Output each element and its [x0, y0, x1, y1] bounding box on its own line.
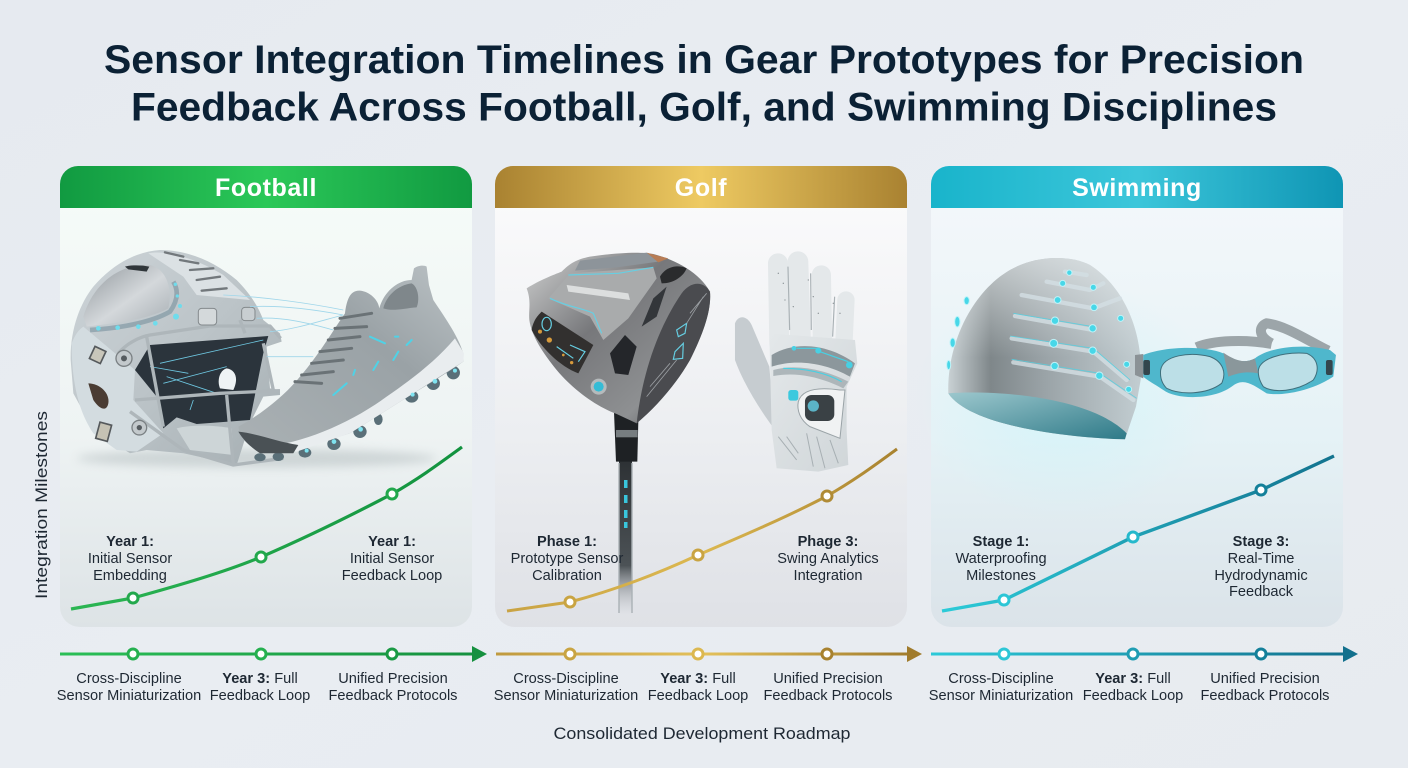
timeline: swimming: Feedback Loop: [1083, 688, 1183, 704]
football label right: Year 1:: [368, 534, 416, 550]
golf label right: Swing Analytics: [777, 551, 879, 567]
timeline: swimming: [929, 646, 1358, 704]
timeline: golf: [494, 646, 922, 704]
football header: [60, 166, 472, 208]
golf label left: Calibration: [532, 568, 602, 584]
timeline: swimming: Year 3: Full: [1095, 671, 1171, 687]
timeline: golf: Sensor Miniaturization: [494, 688, 638, 704]
timeline: golf: Feedback Loop: [648, 688, 748, 704]
club head: [527, 253, 710, 423]
swimming heading: Swimming: [1072, 174, 1202, 202]
illustration: sensor helmet and cleat: [71, 250, 464, 468]
panel: golf: [495, 166, 907, 627]
swimming label left: Stage 1:: [973, 534, 1029, 550]
swim cap: [947, 258, 1141, 439]
timeline: football: Feedback Loop: [210, 688, 310, 704]
timeline: football: Year 3: Full: [222, 671, 298, 687]
golf curve: [507, 449, 897, 611]
football heading: Football: [215, 174, 317, 202]
shaft: [618, 450, 633, 615]
golf label left: Phase 1:: [537, 534, 597, 550]
swimming header: [931, 166, 1343, 208]
timeline: golf: Year 3: Full: [660, 671, 736, 687]
illustration: sensor cap and goggles: [947, 258, 1336, 439]
timeline: golf: Unified Precision: [773, 671, 883, 687]
glow behind cap: [915, 280, 1215, 520]
football curve: [71, 447, 462, 609]
timeline: football: Sensor Miniaturization: [57, 688, 201, 704]
timeline: football: Feedback Protocols: [329, 688, 457, 704]
timeline: football: Cross-Discipline: [76, 671, 182, 687]
swimming label right: Real-Time: [1228, 551, 1294, 567]
timeline: swimming: Cross-Discipline: [948, 671, 1054, 687]
roadmap caption: Consolidated Development Roadmap: [554, 725, 850, 743]
panel: swimming: [915, 166, 1343, 627]
helmet: [71, 250, 283, 465]
golf milestone dots: [565, 491, 832, 607]
football label left: Initial Sensor: [88, 551, 172, 567]
swimming label right: Feedback: [1229, 584, 1294, 600]
golf panel body: [495, 200, 907, 627]
football label left: Year 1:: [106, 534, 154, 550]
thumb: [735, 317, 775, 430]
title: Feedback Across Football, Golf, and Swimming Disciplines: [131, 86, 1277, 130]
golf heading: Golf: [675, 174, 727, 202]
title: Sensor Integration Timelines in Gear Prototypes for Precision: [104, 38, 1304, 82]
golf label left: Prototype Sensor: [511, 551, 624, 567]
title: [104, 38, 1304, 130]
swimming label right: Stage 3:: [1233, 534, 1289, 550]
illustration: driver club: [527, 253, 710, 615]
golf header: [495, 166, 907, 208]
timeline: football: [57, 646, 487, 704]
football label left: Embedding: [93, 568, 167, 584]
y-axis label: Integration Milestones: [33, 411, 51, 599]
ground shadow: [77, 449, 437, 468]
timeline: golf: Cross-Discipline: [513, 671, 619, 687]
cleat shoe: [238, 266, 464, 461]
panel: football: [60, 166, 472, 627]
swimming panel body: [931, 200, 1343, 627]
grip collar: [614, 412, 638, 462]
palm and cuff: [769, 333, 857, 472]
football panel body: [60, 200, 472, 627]
sensor wires: [223, 295, 343, 357]
football label right: Initial Sensor: [350, 551, 434, 567]
football milestone dots: [128, 489, 397, 603]
goggles: [1135, 323, 1336, 397]
timeline: swimming: Sensor Miniaturization: [929, 688, 1073, 704]
golf label right: Integration: [794, 568, 862, 584]
swimming milestone dots: [999, 485, 1266, 605]
football label right: Feedback Loop: [342, 568, 442, 584]
timeline: swimming: Unified Precision: [1210, 671, 1320, 687]
illustration: sensor glove: [735, 262, 857, 472]
timeline: swimming: Feedback Protocols: [1201, 688, 1329, 704]
golf label right: Phage 3:: [798, 534, 858, 550]
timeline: golf: Feedback Protocols: [764, 688, 892, 704]
swimming label left: Milestones: [966, 568, 1036, 584]
swimming label left: Waterproofing: [955, 551, 1047, 567]
swimming curve: [942, 456, 1334, 611]
fingers: [778, 262, 846, 357]
swimming label right: Hydrodynamic: [1214, 568, 1308, 584]
finger gaps: [788, 267, 835, 337]
timeline: football: Unified Precision: [338, 671, 448, 687]
